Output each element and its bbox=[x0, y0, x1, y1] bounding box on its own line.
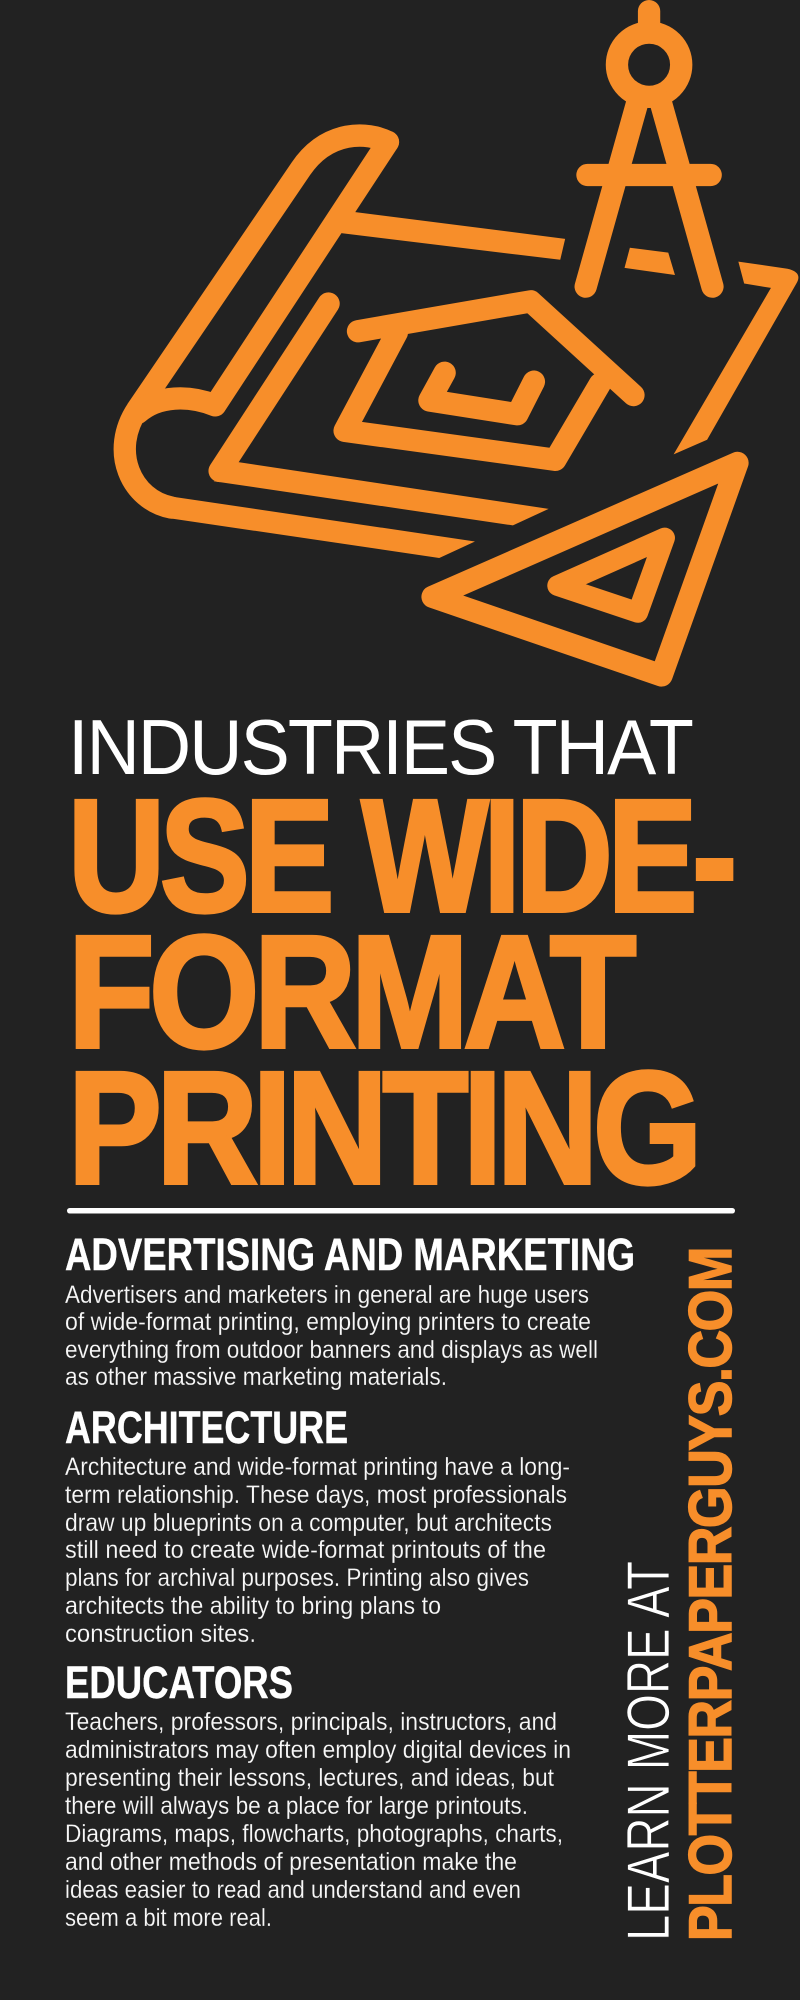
body text: advertising: Advertisers and marketers in general are huge users bbox=[65, 1281, 589, 1309]
body text: architecture: Architecture and wide-format printing have a long- bbox=[65, 1453, 570, 1481]
body text: educators: presenting their lessons, lectures, and ideas, but bbox=[65, 1764, 554, 1792]
vertical call to action bbox=[615, 1248, 744, 1941]
body text: advertising: as other massive marketing materials. bbox=[65, 1363, 447, 1391]
body text: advertising: everything from outdoor banners and displays as well bbox=[65, 1336, 598, 1364]
body text: architecture: plans for archival purposes. Printing also gives bbox=[65, 1564, 529, 1592]
body text: architecture: architects the ability to bring plans to bbox=[65, 1592, 441, 1620]
icon: blueprint with compass and set square bbox=[125, 11, 798, 675]
body text: architecture bbox=[65, 1453, 570, 1648]
body text: educators: seem a bit more real. bbox=[65, 1904, 272, 1932]
icon: inner sheet line bbox=[214, 304, 549, 525]
body text: architecture: still need to create wide-format printouts of the bbox=[65, 1536, 546, 1564]
icon: set square bbox=[433, 463, 737, 675]
body text: advertising bbox=[65, 1281, 598, 1391]
icon: paper roll bbox=[125, 136, 475, 558]
body text: educators: there will always be a place for large printouts. bbox=[65, 1792, 528, 1820]
body text: architecture: term relationship. These days, most professionals bbox=[65, 1481, 567, 1509]
body text: educators: and other methods of presentation make the bbox=[65, 1848, 517, 1876]
body text: architecture: construction sites. bbox=[65, 1620, 256, 1648]
title bbox=[68, 703, 732, 1217]
heading: advertising and marketing: ADVERTISING AND MARKETING bbox=[65, 1229, 635, 1280]
body text: educators: ideas easier to read and understand and even bbox=[65, 1876, 521, 1904]
section: advertising and marketing bbox=[65, 1229, 635, 1391]
body text: educators: Teachers, professors, principals, instructors, and bbox=[65, 1708, 557, 1736]
vertical text: learn more at: LEARN MORE AT bbox=[615, 1561, 682, 1941]
icon: paper edges bbox=[340, 212, 798, 454]
icon: compass bbox=[586, 11, 712, 287]
title line: industries that: INDUSTRIES THAT bbox=[68, 703, 692, 791]
body text: educators: Diagrams, maps, flowcharts, photographs, charts, bbox=[65, 1820, 563, 1848]
body text: educators bbox=[65, 1708, 571, 1932]
vertical text: website: PLOTTERPAPERGUYS.COM bbox=[677, 1248, 744, 1941]
heading: architecture: ARCHITECTURE bbox=[65, 1402, 348, 1453]
body text: educators: administrators may often employ digital devices in bbox=[65, 1736, 571, 1764]
icon: house plan bbox=[345, 301, 633, 460]
section: architecture bbox=[65, 1402, 570, 1648]
heading: educators: EDUCATORS bbox=[65, 1657, 293, 1708]
body text: advertising: of wide-format printing, employing printers to create bbox=[65, 1308, 591, 1336]
title line: printing: PRINTING bbox=[68, 1038, 697, 1217]
body text: architecture: draw up blueprints on a computer, but architects bbox=[65, 1509, 552, 1537]
title line: format: FORMAT bbox=[68, 902, 636, 1081]
title divider bbox=[67, 1208, 735, 1214]
section: educators bbox=[65, 1657, 571, 1932]
